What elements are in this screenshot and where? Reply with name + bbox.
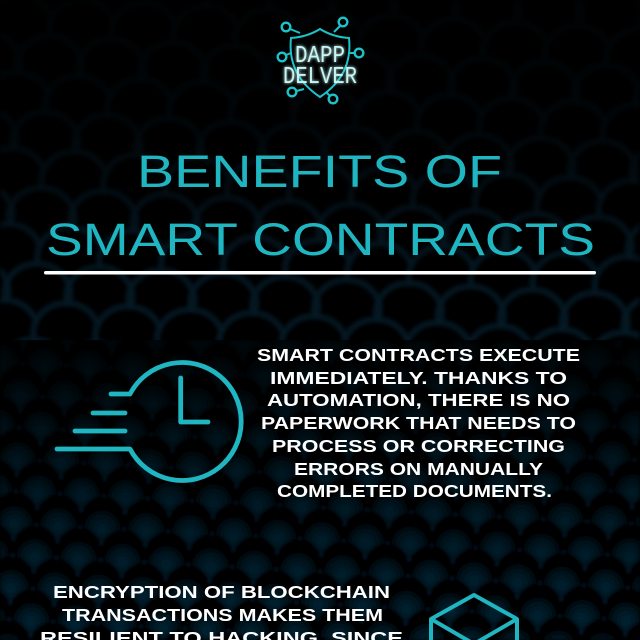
title: SMART CONTRACTS <box>46 214 595 265</box>
text block: encryption <box>40 582 403 640</box>
title: BENEFITS OF <box>137 146 502 197</box>
text block: encryption: TRANSACTIONS MAKES THEM <box>62 605 383 625</box>
text block: immediate execution: PROCESS OR CORRECTING <box>272 436 565 456</box>
text block: encryption: ENCRYPTION OF BLOCKCHAIN <box>53 582 390 602</box>
text block: immediate execution: SMART CONTRACTS EXECUTE <box>257 345 580 365</box>
title underline <box>44 271 596 274</box>
icon: blockchain cube <box>431 595 517 640</box>
text block: immediate execution: AUTOMATION, THERE IS NO <box>267 390 570 410</box>
logo: Dapp Delver shield <box>278 18 363 103</box>
text block: immediate execution: ERRORS ON MANUALLY <box>294 459 543 479</box>
text block: immediate execution: COMPLETED DOCUMENTS. <box>277 481 552 501</box>
text block: immediate execution <box>257 345 580 501</box>
logo wordmark: DELVER <box>283 64 357 91</box>
logo wordmark <box>283 43 357 91</box>
logo wordmark: DAPP <box>295 43 345 70</box>
icon: fast clock <box>57 362 241 480</box>
text block: immediate execution: IMMEDIATELY. THANKS TO <box>270 368 567 388</box>
title <box>46 146 595 265</box>
icon: shield with network nodes <box>278 18 363 103</box>
text block: immediate execution: PAPERWORK THAT NEEDS TO <box>261 413 576 433</box>
